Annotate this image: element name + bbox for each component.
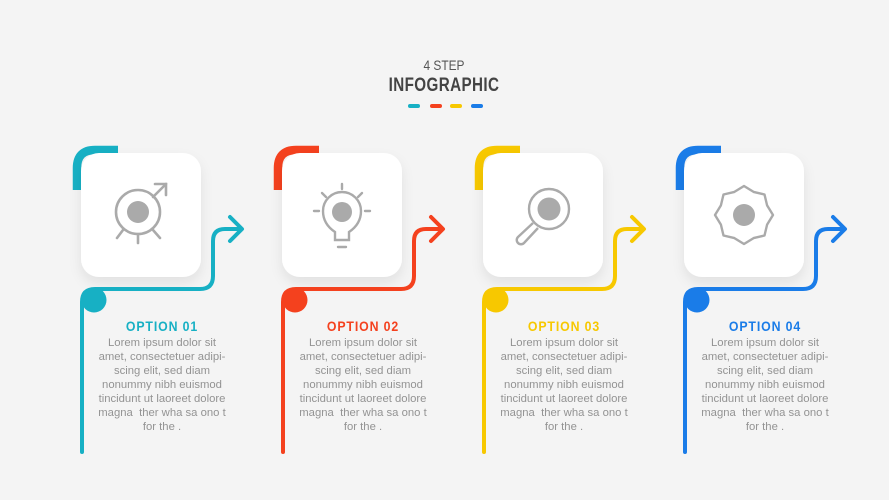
option 1 text: nonummy nibh euismod [102, 379, 222, 391]
option 2 text: OPTION 02 [327, 318, 399, 334]
option 2 text: for the . [344, 421, 382, 433]
option 2 text: scing elit, sed diam [315, 365, 411, 377]
option 1 text: magna ther wha sa ono t [98, 407, 226, 419]
option 4 text [701, 318, 829, 433]
option 4 text: Lorem ipsum dolor sit [711, 337, 819, 349]
option 3 text: scing elit, sed diam [516, 365, 612, 377]
option 2 text: tincidunt ut laoreet dolore [300, 393, 426, 405]
option 4 text: scing elit, sed diam [717, 365, 813, 377]
option 4 text: amet, consectetuer adipi- [702, 351, 828, 363]
option 3 text: tincidunt ut laoreet dolore [501, 393, 627, 405]
title [389, 57, 499, 96]
option 1 text: OPTION 01 [126, 318, 198, 334]
panel 2 graphics [278, 150, 443, 452]
option 3 text: amet, consectetuer adipi- [501, 351, 627, 363]
panel 4 graphics [680, 150, 845, 452]
option 2 text [299, 318, 427, 433]
option 2 text: amet, consectetuer adipi- [300, 351, 426, 363]
option 1 text: Lorem ipsum dolor sit [108, 337, 216, 349]
panel 1 graphics [77, 150, 242, 452]
panel 3 graphics [479, 150, 644, 452]
title: 4 STEP [423, 57, 465, 73]
title: INFOGRAPHIC [389, 75, 499, 96]
option 1 text: amet, consectetuer adipi- [99, 351, 225, 363]
option 3 text: Lorem ipsum dolor sit [510, 337, 618, 349]
option 3 text [500, 318, 628, 433]
option 1 text: tincidunt ut laoreet dolore [99, 393, 225, 405]
option 4 text: magna ther wha sa ono t [701, 407, 829, 419]
option 2 text: magna ther wha sa ono t [299, 407, 427, 419]
option 3 text: magna ther wha sa ono t [500, 407, 628, 419]
option 4 text: tincidunt ut laoreet dolore [702, 393, 828, 405]
option 1 text [98, 318, 226, 433]
option 4 text: for the . [746, 421, 784, 433]
option 2 text: Lorem ipsum dolor sit [309, 337, 417, 349]
title dashes [410, 104, 481, 108]
option 1 text: scing elit, sed diam [114, 365, 210, 377]
option 4 text: nonummy nibh euismod [705, 379, 825, 391]
option 4 text: OPTION 04 [729, 318, 801, 334]
option 3 text: for the . [545, 421, 583, 433]
option 1 text: for the . [143, 421, 181, 433]
option 3 text: OPTION 03 [528, 318, 600, 334]
option 2 text: nonummy nibh euismod [303, 379, 423, 391]
option 3 text: nonummy nibh euismod [504, 379, 624, 391]
